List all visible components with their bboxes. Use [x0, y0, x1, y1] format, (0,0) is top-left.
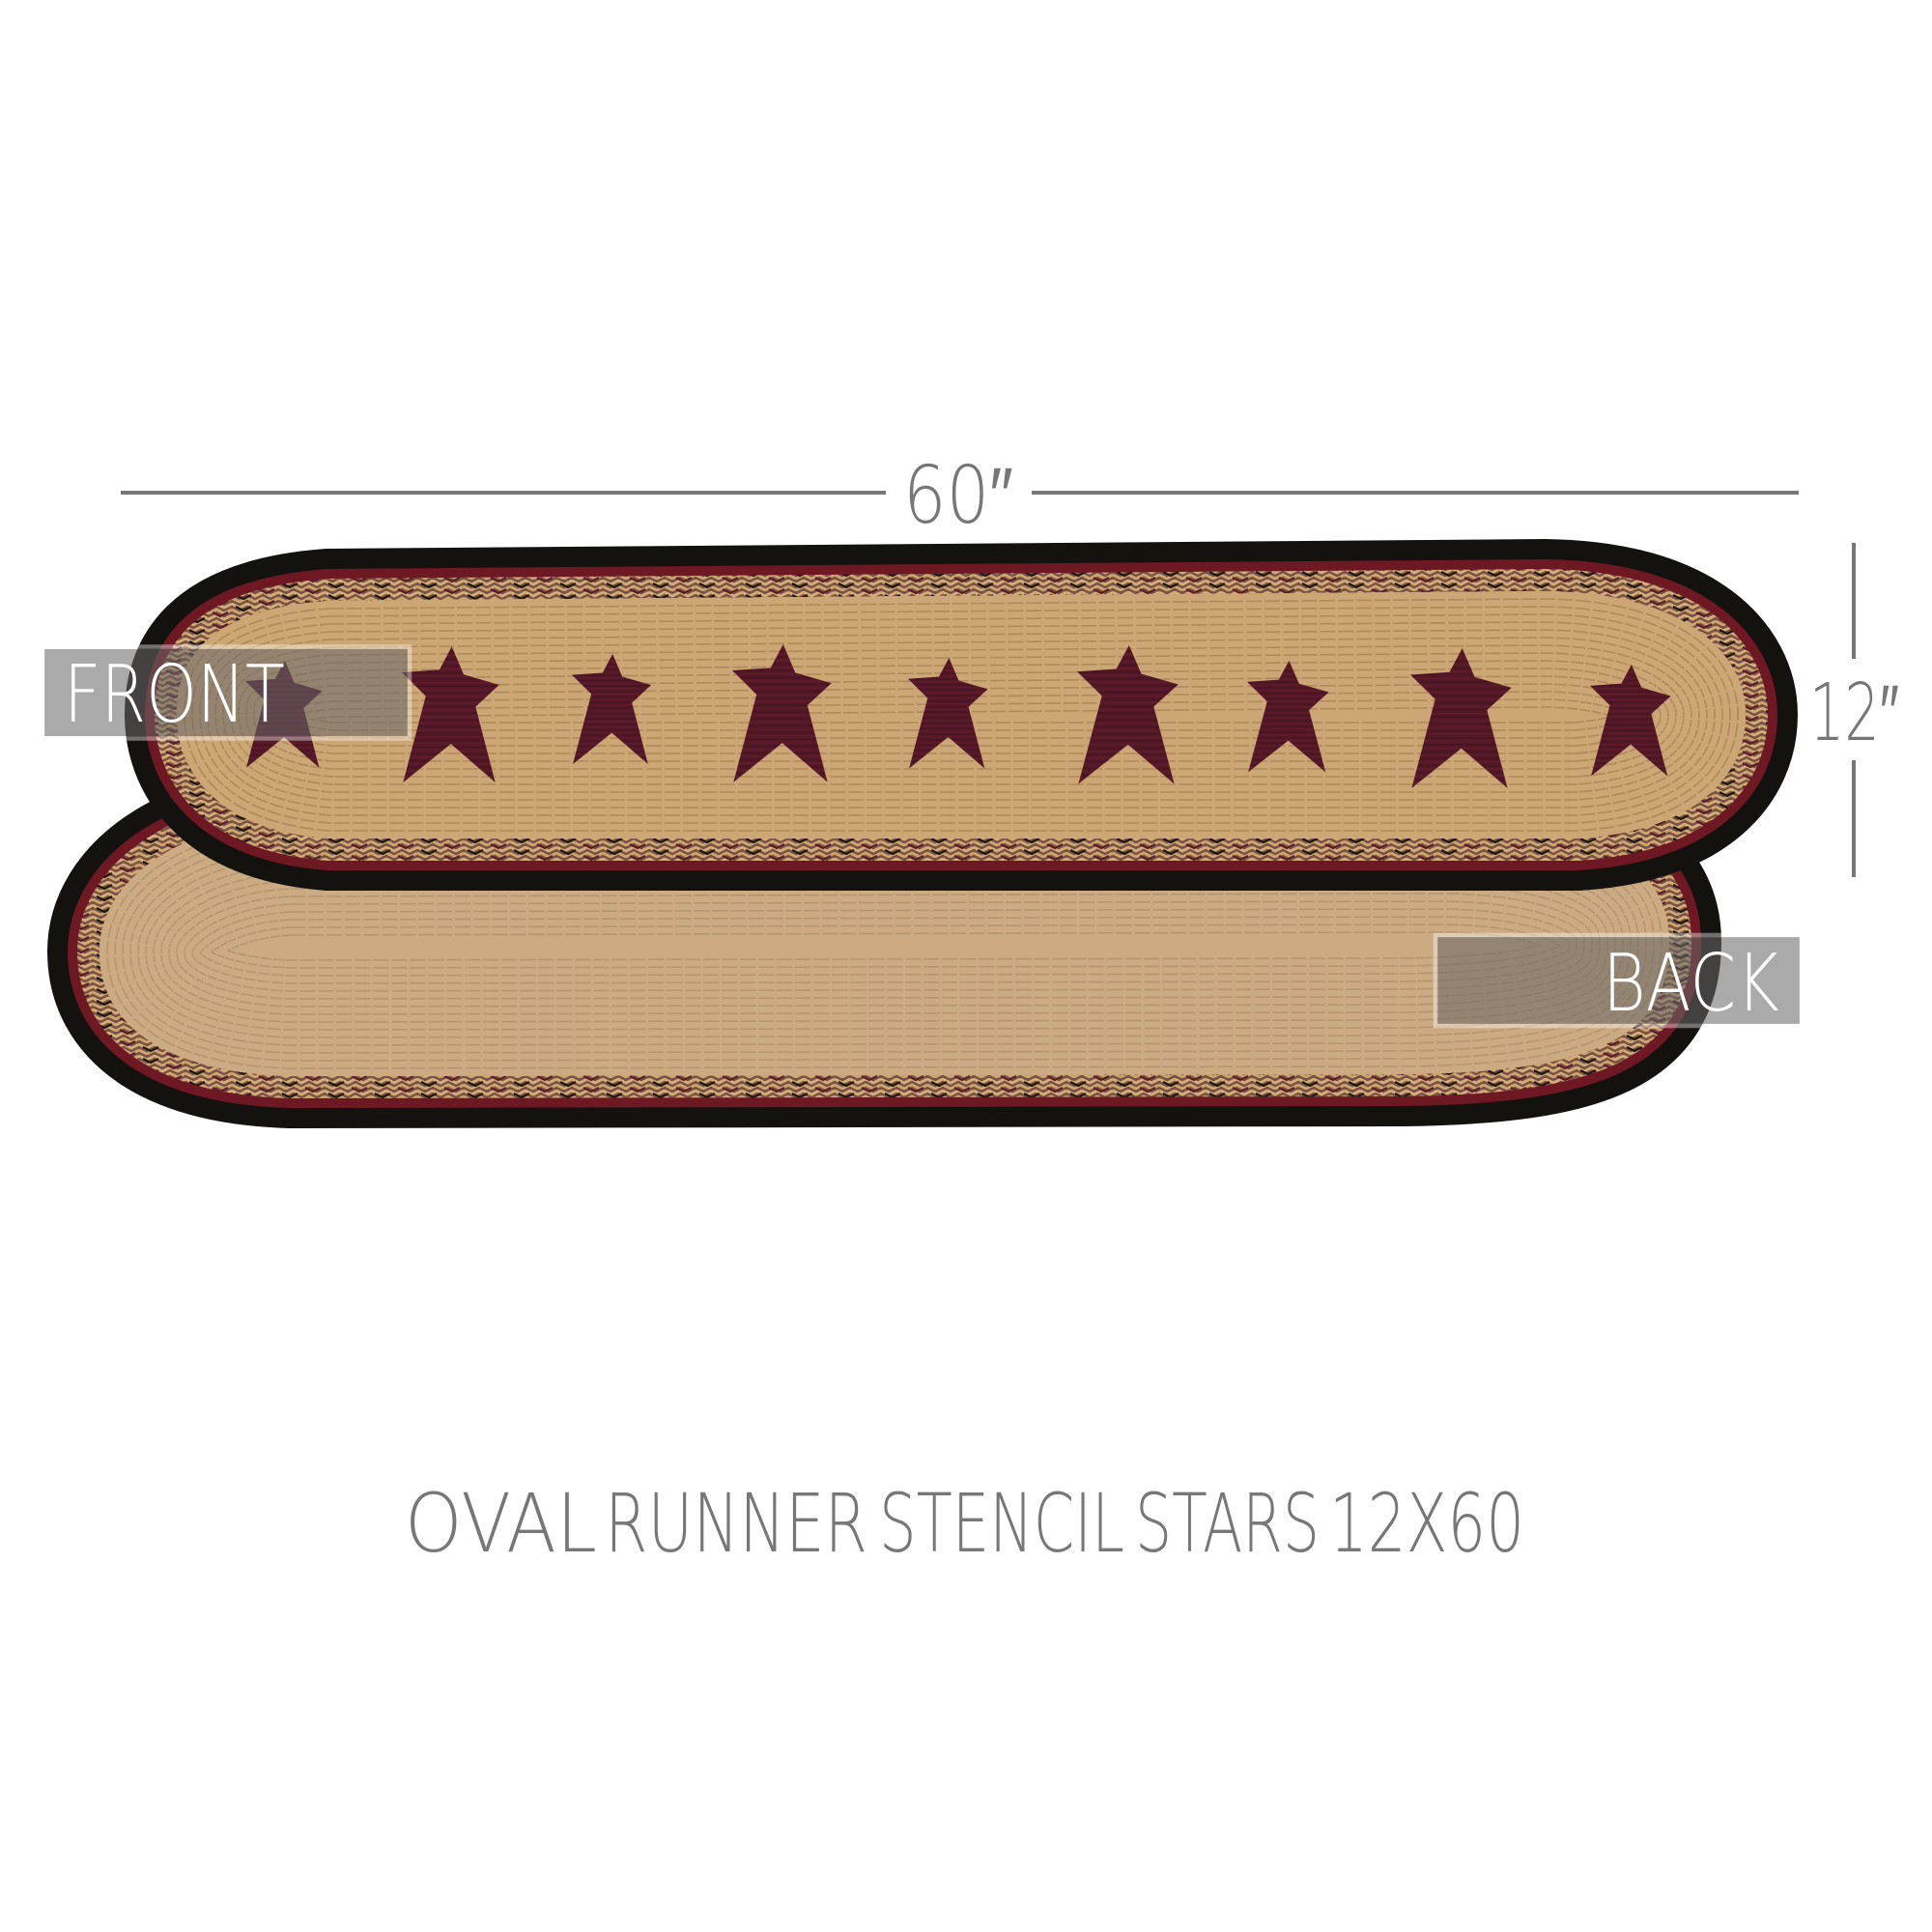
star 5 [908, 658, 988, 769]
star 1 [245, 661, 323, 768]
title [405, 1476, 1524, 1571]
star 2 [402, 646, 499, 782]
dimension: width 60 inches: 60″ [903, 450, 1013, 542]
label: front: FRONT [64, 649, 285, 741]
dimension: height 12 inches [1809, 543, 1899, 877]
star 8 [1410, 648, 1512, 788]
title: OVAL [405, 1476, 597, 1571]
title: 12X60 [1329, 1476, 1524, 1571]
stars on front rug [245, 644, 1671, 788]
rug: front side [177, 591, 1746, 838]
star 3 [572, 654, 651, 764]
title: STENCIL [879, 1476, 1124, 1571]
label: back [1435, 935, 1802, 1030]
dimension: width 60 inches [121, 450, 1799, 542]
label: back: BACK [1603, 938, 1779, 1030]
star 6 [1077, 645, 1179, 784]
rug: back side [99, 816, 1669, 1076]
star 9 [1590, 665, 1671, 776]
title: RUNNER [605, 1476, 867, 1571]
star 7 [1247, 661, 1329, 772]
star 4 [732, 644, 832, 782]
title: STARS [1135, 1476, 1320, 1571]
